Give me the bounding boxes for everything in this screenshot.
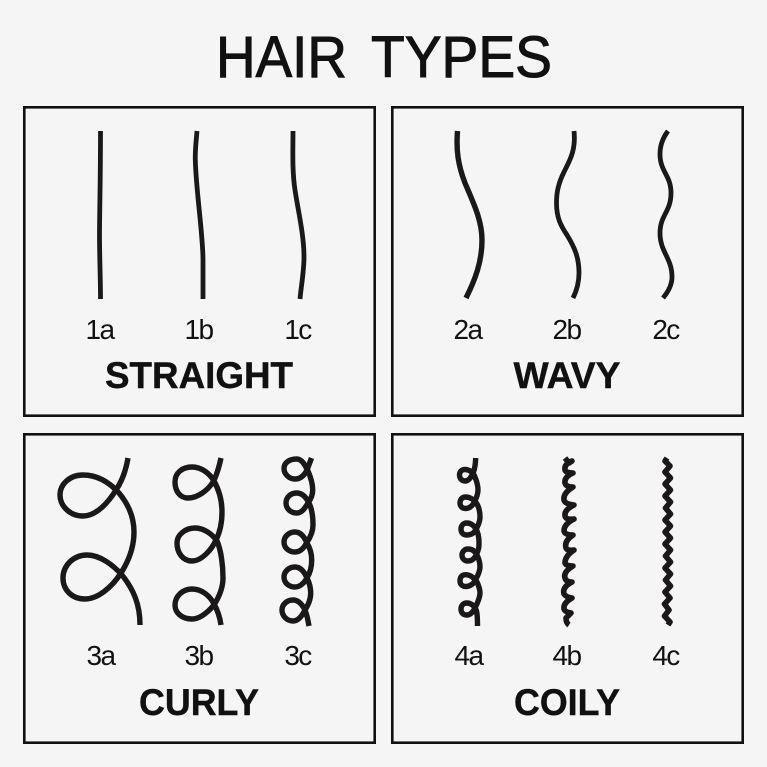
title: HAIR: [216, 25, 347, 90]
label 3c: 3c: [284, 640, 312, 671]
heading: curly: CURLY: [139, 682, 259, 723]
hair strand 2b: [556, 131, 579, 298]
label 1b: 1b: [185, 314, 213, 345]
label 2c: 2c: [652, 314, 680, 345]
heading: coily: COILY: [514, 682, 620, 723]
hair strand 1c: [293, 131, 304, 299]
label 1c: 1c: [284, 314, 312, 345]
label 2a: 2a: [454, 314, 483, 345]
hair strand 3a: [60, 458, 140, 625]
hair strand 4b: [564, 458, 574, 625]
title: TYPES: [371, 25, 552, 90]
label 2b: 2b: [553, 314, 581, 345]
hair strand 4c: [664, 458, 670, 625]
label 3a: 3a: [87, 640, 116, 671]
title: [216, 25, 552, 90]
hair strand 2a: [457, 131, 482, 298]
heading: straight: STRAIGHT: [105, 355, 293, 396]
panel: curly: [24, 434, 375, 743]
hair strand 1a: [100, 131, 101, 299]
hair strand 3c: [282, 458, 313, 626]
label 1a: 1a: [86, 314, 115, 345]
label 4c: 4c: [652, 640, 680, 671]
hair strand 2c: [660, 131, 672, 298]
hair strand 4a: [460, 458, 480, 626]
panel: straight: [24, 107, 375, 416]
panel: coily: [392, 434, 743, 743]
hair strand 3b: [175, 458, 223, 625]
label 3b: 3b: [185, 640, 213, 671]
label 4a: 4a: [455, 640, 484, 671]
hair strand 1b: [195, 131, 203, 299]
panel: wavy: [392, 107, 743, 416]
heading: wavy: WAVY: [514, 355, 621, 396]
label 4b: 4b: [553, 640, 581, 671]
